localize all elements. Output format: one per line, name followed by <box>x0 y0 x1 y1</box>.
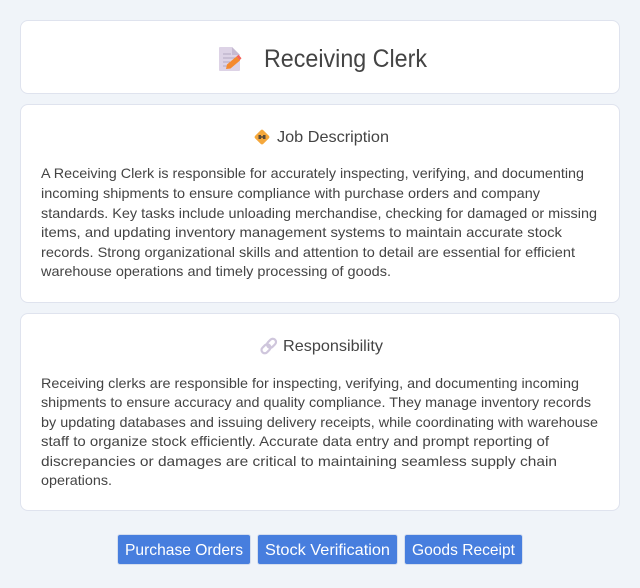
text block: job description: records. Strong organizational skills and attention to detail are essential for efficient <box>41 244 575 260</box>
label: Stock Verification: Stock Verification <box>265 542 390 559</box>
text block: responsibility: shipments to ensure accuracy and quality compliance. They manage inventory records <box>41 394 591 410</box>
icon: document with pencil <box>219 47 242 71</box>
text block: responsibility: by updating databases and issuing delivery receipts, while coordinating with warehouse <box>41 414 598 430</box>
text block: responsibility: Receiving clerks are responsible for inspecting, verifying, and documenting incoming <box>41 375 579 391</box>
text block: job description: incoming shipments to ensure compliance with purchase orders and company <box>41 185 540 201</box>
icon: job description diamond <box>254 129 270 145</box>
text block: job description <box>40 165 597 279</box>
panel: title card <box>20 20 620 94</box>
text block: responsibility: discrepancies or damages are critical to maintaining seamless supply chain <box>41 453 557 469</box>
text block: responsibility: staff to organize stock efficiently. Accurate data entry and prompt reporting of <box>41 433 549 449</box>
text block: responsibility: operations. <box>41 472 112 488</box>
text block: job description: items, and updating inventory management systems to maintain accurate stock <box>41 224 563 240</box>
panel: job description card <box>20 104 620 303</box>
heading: Responsibility: Responsibility <box>283 338 383 355</box>
text block: job description: warehouse operations and timely processing of goods. <box>40 263 391 279</box>
button: Goods Receipt <box>404 534 523 565</box>
heading: Job Description: Job Description <box>277 129 389 146</box>
icon: chain link <box>260 337 277 355</box>
text block: job description: A Receiving Clerk is responsible for accurately inspecting, verifying, and documenting <box>41 165 584 181</box>
text block: job description: standards. Key tasks include unloading merchandise, checking for damaged or missing <box>41 205 597 221</box>
button: Purchase Orders <box>117 534 251 565</box>
button: Stock Verification <box>257 534 398 565</box>
label: Purchase Orders: Purchase Orders <box>125 542 243 559</box>
title: Receiving Clerk <box>264 45 427 73</box>
text block: responsibility <box>41 375 598 488</box>
panel: responsibility card <box>20 313 620 511</box>
label: Goods Receipt: Goods Receipt <box>412 542 516 559</box>
